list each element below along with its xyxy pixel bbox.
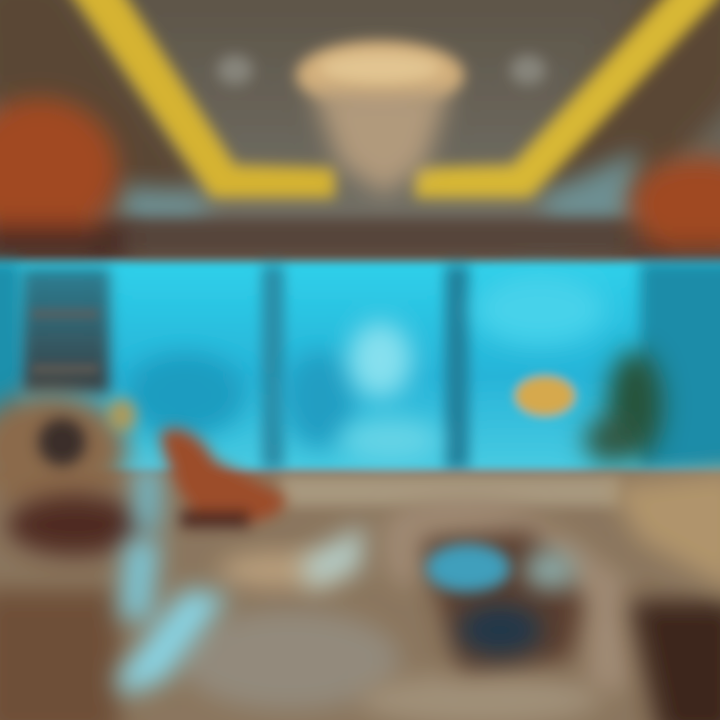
orange dome right (630, 157, 720, 261)
blue reflections on floor (115, 465, 365, 695)
brown ceiling band (90, 218, 670, 256)
ceiling (0, 0, 720, 250)
central sofa and table (385, 498, 630, 690)
aquarium windows (0, 262, 720, 470)
yellow fish (515, 376, 575, 416)
orange lounge chair (160, 428, 286, 528)
plant (584, 350, 663, 464)
left bookshelf (22, 268, 110, 393)
yellow ceiling beams (62, 0, 720, 198)
floor (0, 472, 720, 720)
orange dome left (0, 98, 125, 260)
chandelier (217, 41, 546, 195)
left table cluster (0, 392, 143, 555)
right cabinet (610, 470, 720, 720)
